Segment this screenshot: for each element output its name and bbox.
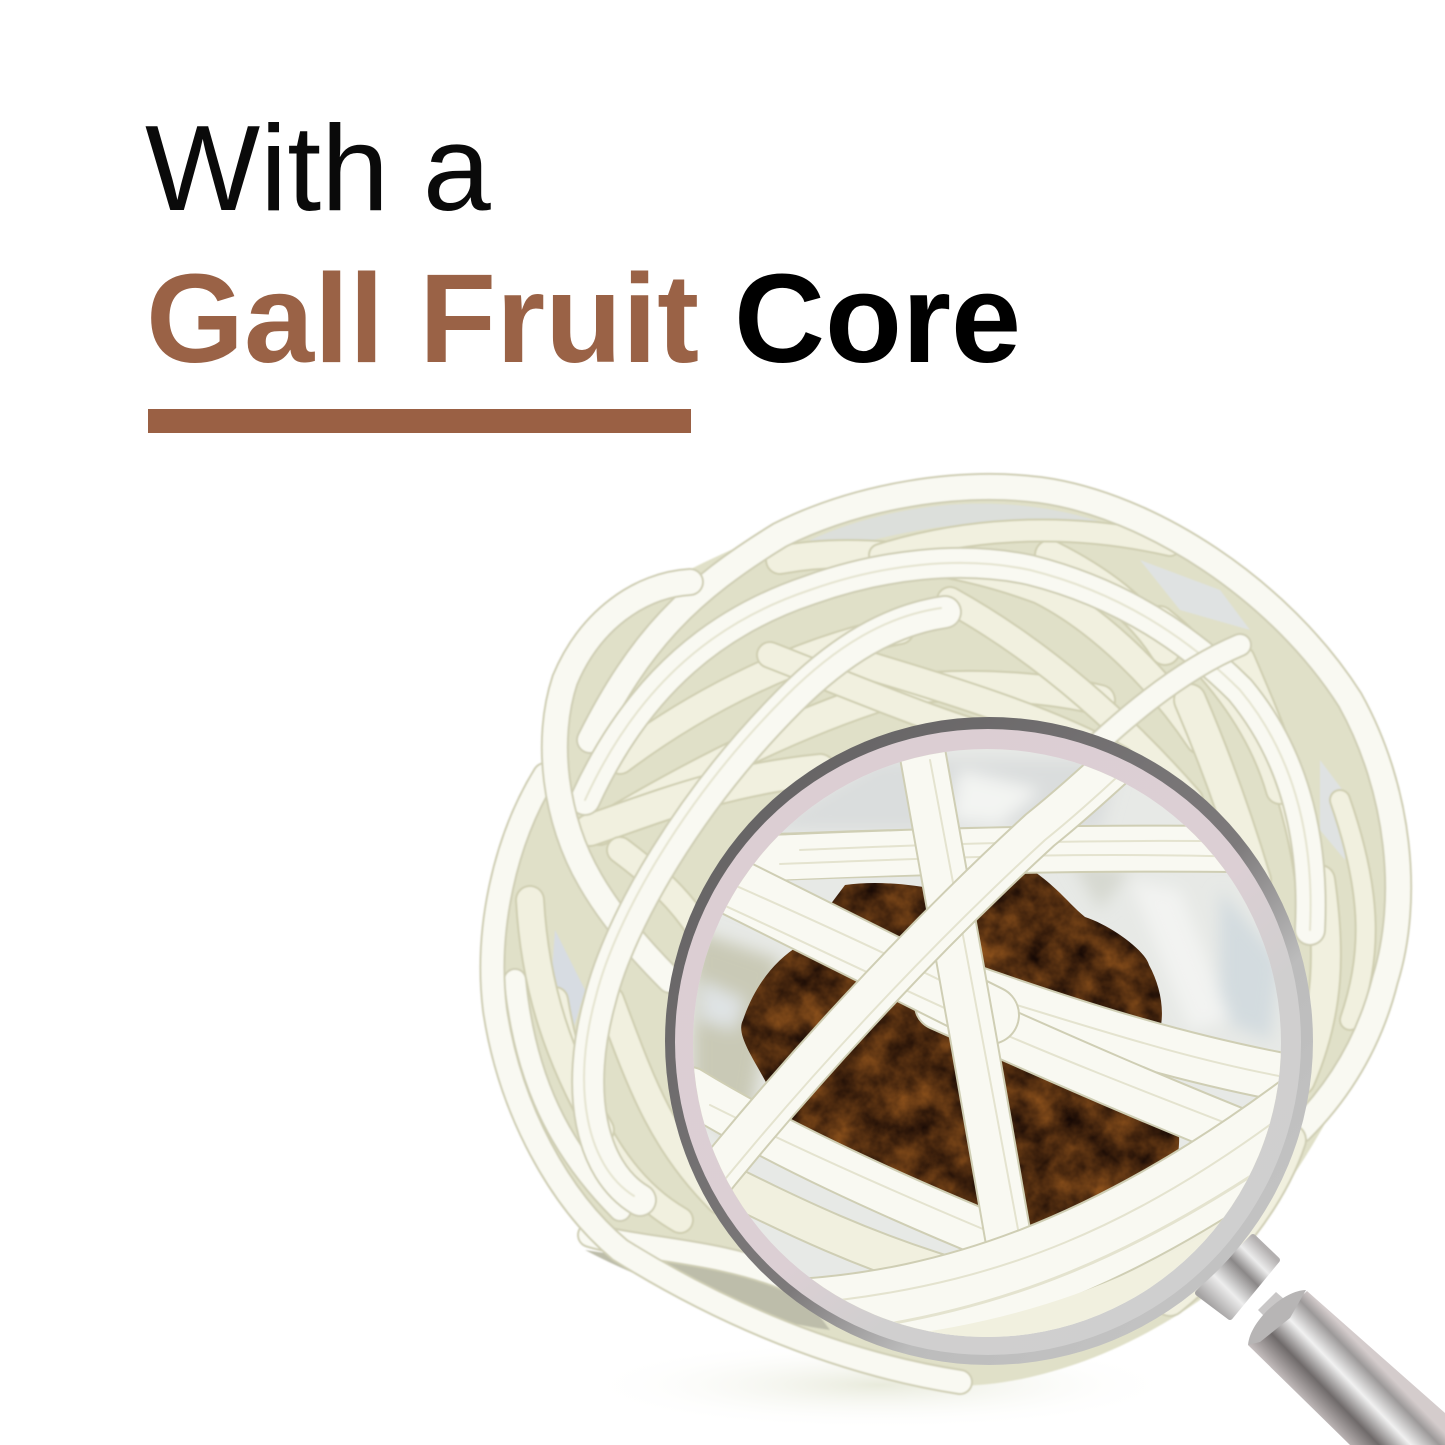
handle collar [1198,1237,1277,1317]
handle neck [1258,1292,1292,1326]
title: With a: With a [145,100,491,236]
back strands [530,531,1366,1220]
horizontal strand [740,849,1300,858]
right strand one [960,985,1310,1082]
lower-left strand one [690,1090,1000,1240]
handle shaft [1248,1291,1445,1445]
front strands [492,487,1398,1382]
gall fruit core [741,869,1179,1235]
lower-left strand two [733,1172,944,1270]
handle cap [1248,1290,1306,1345]
right strand two [914,1010,1242,1142]
handle [1198,1237,1445,1445]
lens view [693,749,1281,1337]
lens ring [665,717,1313,1365]
lower cream fill [1136,1222,1220,1270]
grey gaps between strands [810,504,1110,560]
ball of white rattan strands [492,486,1398,1386]
bottom wide band [800,1110,1310,1320]
soft shadow under the ball [580,1340,1180,1430]
magnifying glass [665,690,1445,1445]
lens background [693,749,1281,1277]
left band [680,860,990,1015]
vertical strand [921,745,1012,1260]
ball backdrop [494,486,1391,1386]
inner ring band [675,729,1301,1355]
lens strands [694,752,1281,1337]
diagonal strand [712,765,1126,1190]
title: Gall Fruit Core: Gall Fruit Core [146,248,1021,389]
title underline [148,409,691,433]
